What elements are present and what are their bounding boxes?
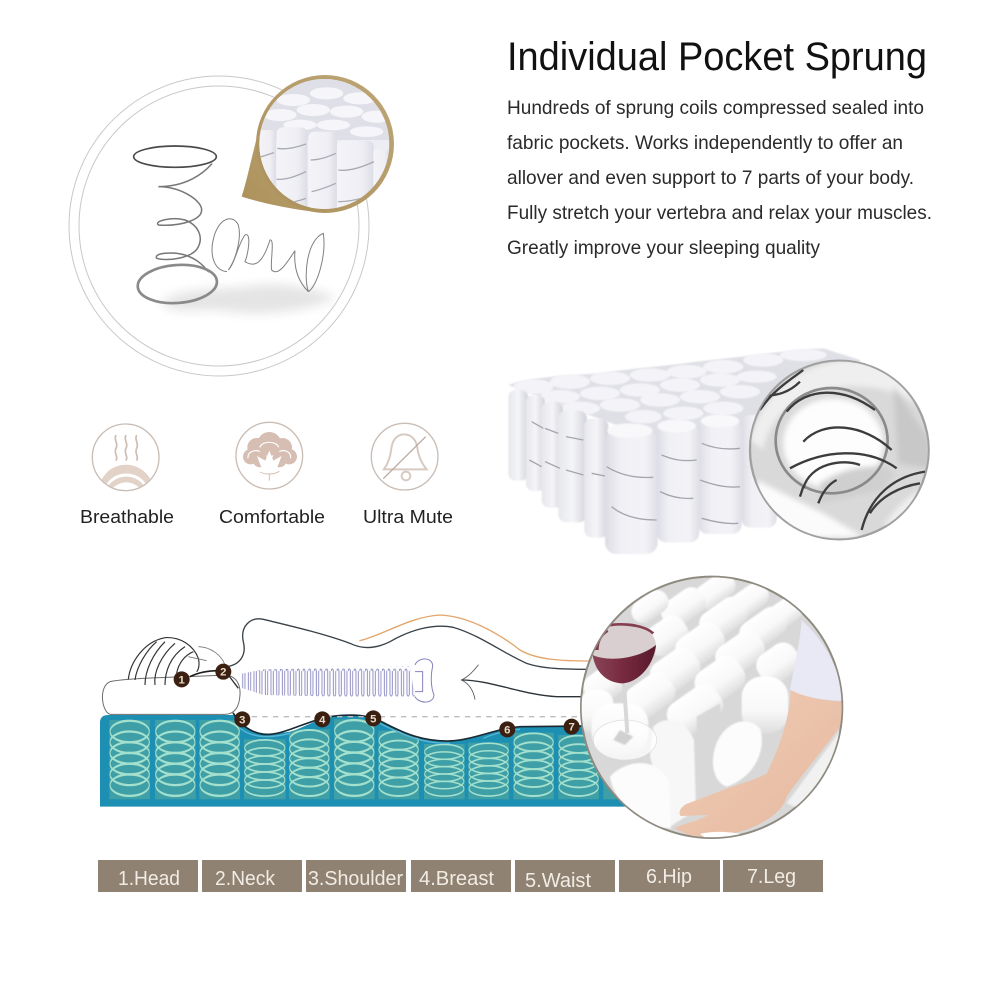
- marker 2: 2: [220, 667, 226, 679]
- label: ultra mute: Ultra Mute: [363, 507, 453, 527]
- magnified coil lens: [750, 360, 930, 540]
- pillow: [102, 675, 240, 714]
- spring shadow: [160, 284, 337, 313]
- marker 7: 7: [568, 722, 575, 734]
- marker 4: [314, 711, 330, 727]
- mattress base: [100, 715, 657, 807]
- marker 3: 3: [239, 714, 245, 726]
- spine: [240, 659, 434, 702]
- marker 4: 4: [319, 714, 326, 726]
- label 1 head: [98, 860, 198, 892]
- label 3 shoulder: 3.Shoulder: [308, 868, 403, 890]
- mattress contour highlight: [240, 723, 520, 743]
- label 5 waist: 5.Waist: [525, 870, 591, 892]
- dashed reference line: [252, 715, 590, 719]
- marker 3: [234, 711, 250, 727]
- panel: pocket coil photo with wine glass: [578, 568, 843, 842]
- sleeve: [790, 620, 843, 701]
- body zone labels: [98, 860, 823, 892]
- spring coil upright: [134, 146, 324, 306]
- label 7 leg: [723, 860, 823, 892]
- pocket columns: [259, 128, 389, 209]
- description text block: Fully stretch your vertebra and relax your muscles.: [507, 202, 932, 224]
- number markers: [174, 664, 580, 737]
- magnifier lens with pocket springs: [242, 75, 394, 218]
- marker 7: [564, 719, 580, 735]
- panel: pocket spring block photo: [508, 348, 930, 554]
- title: Individual Pocket Sprung: [507, 35, 927, 79]
- description text block: Hundreds of sprung coils compressed sealed into: [507, 97, 924, 119]
- label 2 neck: [202, 860, 302, 892]
- body outline: [227, 615, 590, 741]
- side and front pocket columns: [508, 390, 777, 554]
- wine glass: [593, 623, 657, 760]
- label 2 neck: 2.Neck: [215, 868, 276, 890]
- block top surface: [508, 348, 873, 517]
- label 4 breast: [411, 860, 511, 892]
- panel: body zones on mattress diagram: [100, 615, 657, 807]
- icon: cotton: [236, 422, 303, 489]
- description text block: [507, 97, 932, 259]
- head and hair: [128, 638, 238, 688]
- label 4 breast: 4.Breast: [419, 868, 494, 890]
- spring coil lying: [212, 219, 324, 292]
- marker 5: 5: [370, 713, 376, 725]
- label 6 hip: [619, 860, 720, 892]
- pocket tops: [257, 77, 392, 140]
- arm and hand: [674, 690, 843, 838]
- coil springs: [110, 720, 598, 796]
- marker 1: [174, 671, 190, 687]
- pocket tops: [513, 349, 827, 423]
- marker 6: [499, 721, 515, 737]
- spring drawing: [134, 146, 337, 313]
- label 6 hip: 6.Hip: [646, 866, 692, 888]
- feature icons row: [80, 422, 453, 527]
- label: comfortable: Comfortable: [219, 507, 325, 527]
- marker 1: 1: [179, 674, 185, 686]
- description text block: fabric pockets. Works independently to offer an: [507, 132, 903, 154]
- spring cells: [109, 719, 644, 799]
- double ring border: [69, 76, 369, 376]
- body silhouette: [227, 618, 657, 741]
- label 5 waist: [515, 860, 615, 892]
- marker 6: 6: [504, 724, 510, 736]
- label 1 head: 1.Head: [118, 868, 180, 890]
- label 3 shoulder: [306, 860, 406, 892]
- panel: spring coil illustration: [69, 75, 394, 376]
- marker 5: [365, 710, 381, 726]
- description text block: allover and even support to 7 parts of your body.: [507, 167, 914, 189]
- description text block: Greatly improve your sleeping quality: [507, 237, 820, 259]
- icon: breathable: [92, 424, 159, 492]
- pocket rows: [578, 568, 843, 828]
- icon: muted bell: [371, 423, 438, 490]
- marker 2: [215, 664, 231, 680]
- label 7 leg: 7.Leg: [747, 866, 796, 888]
- label: breathable: Breathable: [80, 507, 174, 527]
